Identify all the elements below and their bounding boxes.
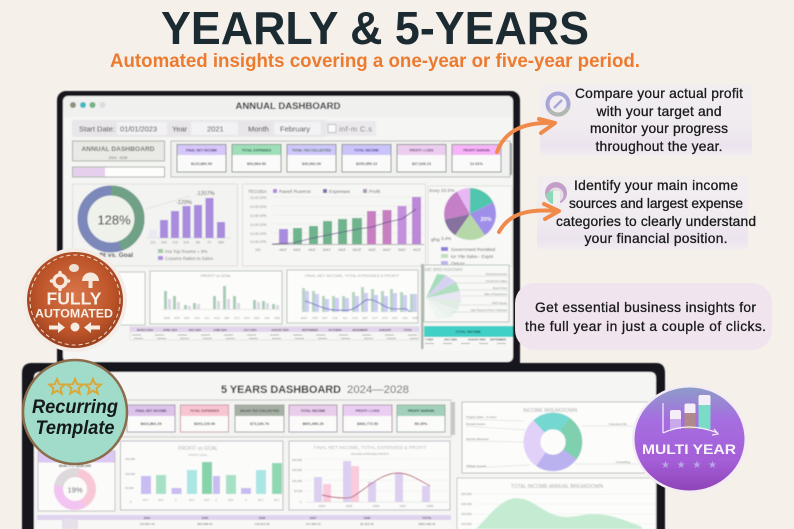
KPI cards row: TOTAL EXPENSES (242, 148, 272, 152)
panel: final net income chart: 2027 (400, 504, 407, 508)
panel: final net income chart: APR (312, 316, 318, 320)
panel: income breakdown fan chart: NWS Equity (492, 301, 508, 305)
window control dots (70, 102, 106, 108)
bar chart: purple bars: 5A (196, 240, 201, 244)
KPI cards row: PROFIT / LOSS (410, 148, 434, 152)
panel: income breakdown fan chart: Late Payment Fees Collected (470, 308, 507, 312)
panel: profit vs goal chart: 150,000 (125, 457, 136, 461)
panel: profit vs goal chart (120, 441, 283, 510)
panel: monthly bars and line chart: Profit (369, 189, 381, 195)
five years heading: 2024—2028 (347, 384, 409, 396)
panel: final net income chart: FINAL NET INCOME, TOTAL EXPENSES & PROFIT (305, 273, 400, 278)
filter bar: Start Date: (79, 124, 115, 134)
panel: final net income chart: 2028 (427, 504, 434, 508)
panel: final net income chart: MAR (301, 316, 307, 320)
panel: expense pie chart: 3.4% (441, 236, 451, 241)
callout: identify income sources: your financial position. (584, 231, 728, 246)
panel: final net income chart: INCOME EXPENSES PROFIT (351, 452, 389, 456)
bar chart: purple bars: Hot Top Rooms = 9% (165, 249, 208, 254)
table: yearly figures (37, 514, 451, 529)
callout: compare actual profit: monitor your progress (590, 121, 728, 136)
panel: monthly bars and line chart: 4A3' (293, 248, 301, 252)
panel: monthly bars and line chart: 10.00 EPK (250, 214, 267, 218)
panel: profit vs goal chart: J' (215, 498, 217, 502)
badge: fully automated: FULLY (46, 288, 102, 308)
panel: income breakdown fan chart (421, 264, 509, 349)
KPI cards row: 22.61% (470, 162, 484, 166)
panel: profit vs goal chart: J'' (175, 498, 178, 502)
panel: profit vs goal chart: PROFIT vs GOAL (201, 274, 231, 278)
bar chart: purple bars: 116 (183, 240, 189, 244)
KPI cards row: SALES TAX COLLECTED (240, 409, 280, 413)
table: total income teal: AUGUST 2024 (468, 338, 486, 342)
table: annual monthly figures: SEPTEMBER (302, 328, 318, 332)
table: annual monthly figures: MAY 2024 (189, 328, 202, 332)
panel: profit vs goal chart: J'' (245, 498, 248, 502)
table: total income teal (424, 326, 513, 350)
panel: monthly bars and line chart: 4A3' (368, 248, 376, 252)
panel: profit vs goal chart: M'H' (158, 498, 164, 502)
icon: gear (50, 271, 70, 291)
filter bar: Year (172, 124, 188, 134)
callout: compare actual profit: Compare your actual profit (575, 86, 743, 101)
panel: monthly bars and line chart: 4G3' (413, 248, 421, 252)
panel: final net income chart: JUN (332, 316, 338, 320)
left title box (72, 141, 164, 177)
panel: monthly bars and line chart: M4J' (323, 248, 331, 252)
panel: monthly bars and line chart: 10.00 EPK (250, 232, 267, 236)
panel: monthly bars and line chart: 10.00 EPK (250, 223, 267, 227)
panel: income breakdown donut: Affiliate Income (466, 464, 487, 468)
bar chart: purple bars: 111 (150, 240, 156, 244)
panel: profit vs goal chart: M'J'' (274, 498, 280, 502)
panel: income breakdown donut (462, 402, 656, 473)
bar chart: purple bars: Cosums Ratles In Sales (165, 256, 214, 261)
filter bar: 2021 (207, 124, 224, 134)
panel: total income annual breakdown area chart: 200,000 (461, 502, 472, 506)
bar chart: purple bars: -120% (176, 200, 192, 206)
panel: total income annual breakdown area chart: 100,000 (461, 522, 472, 526)
panel: income breakdown donut: INCOME BREAKDOWN (523, 408, 578, 414)
KPI cards row: $691,096.29 (302, 422, 324, 426)
panel: total income annual breakdown area chart: TOTAL INCOME ANNUAL BREAKDOWN (511, 484, 604, 490)
panel: final net income chart: MAY (322, 316, 328, 320)
icon: chat bubble (69, 264, 79, 272)
panel: final net income chart: 100,000 (292, 479, 303, 483)
KPI cards row: TOTAL EXPENSES (190, 409, 220, 413)
KPI cards row: $120,893.00 (191, 162, 212, 166)
filter bar: February (280, 124, 310, 134)
filter bar (72, 120, 376, 137)
KPI cards row: $30,062.00 (302, 162, 321, 166)
panel: income breakdown fan chart: ME BREAKDOWN (425, 267, 463, 272)
panel: income breakdown donut: Project Sales - In-store (466, 415, 497, 419)
table: total income teal: SEPTEMBER (490, 338, 506, 342)
table: annual monthly figures: MARCH 2024 (137, 328, 154, 332)
table: total income teal: Y 2024 (425, 338, 434, 342)
panel: final net income chart: 2024 (319, 504, 326, 508)
pie chart: 20% (480, 217, 492, 223)
panel: monthly bars and line chart: 1KI (255, 248, 261, 252)
callout: essential business insights (515, 283, 772, 350)
panel: monthly bars and line chart: 4A3' (338, 248, 346, 252)
panel: profit vs goal chart: M'H' (228, 498, 234, 502)
panel: profit vs goal chart: M'P' (204, 498, 210, 502)
KPI cards row: PROFIT MARGIN (463, 148, 490, 152)
donut: 128% (82, 190, 140, 248)
table: yearly figures: 2024 (144, 516, 151, 520)
panel: profit vs goal chart: M'Y'' (143, 498, 150, 502)
table: annual monthly figures (130, 326, 419, 340)
table: annual monthly figures: NOVEMBER (352, 328, 368, 332)
panel: profit vs goal chart: JUL (205, 316, 210, 320)
panel: income breakdown fan chart: Reimbursements (486, 272, 508, 276)
panel: profit vs goal chart: JAN (264, 316, 270, 320)
badge: recurring template: Template (36, 418, 115, 439)
panel: profit vs goal donut and bars: Profit vs. Goal (89, 252, 133, 259)
panel: final net income chart: FINAL NET INCOME, TOTAL EXPENSES & PROFIT (314, 445, 426, 451)
panel: goal donut 19%: 19% (67, 486, 83, 494)
panel: final net income chart: 2026 (373, 504, 380, 508)
table: annual monthly figures: JUNE 2024 (213, 328, 227, 332)
table: annual monthly figures: OCTOBER (329, 328, 342, 332)
panel: final net income chart (289, 441, 450, 510)
panel: profit vs goal chart: MAY (184, 316, 190, 320)
panel: profit vs goal chart: APR (174, 316, 180, 320)
KPI cards row: PROFIT MARGIN (408, 409, 435, 413)
table: yearly figures: 145,912.06 (254, 522, 270, 526)
panel: monthly bars and line chart: 10.00 EPK (250, 205, 267, 209)
table: yearly figures: 2027 (310, 516, 317, 520)
callout: identify income sources (537, 176, 756, 250)
table: total income teal: TOTAL INCOME (455, 330, 481, 334)
table: yearly figures: 147,406.45 (305, 522, 321, 526)
KPI cards row (171, 141, 512, 177)
callout: compare actual profit (540, 84, 752, 156)
panel: monthly bars and line chart: Ravell Ruerros (279, 189, 311, 195)
KPI cards row (122, 400, 455, 437)
table: yearly figures: $1,302.45 (360, 522, 374, 526)
title: YEARLY & 5-YEARS (161, 2, 589, 54)
panel: final net income chart: 50,000 (294, 489, 303, 493)
table: yearly figures: 2026 (259, 516, 266, 520)
callout: compare actual profit: throughout the year. (596, 139, 722, 154)
KPI cards row: $73,106.76 (250, 422, 269, 426)
panel: profit vs goal chart: OCT (234, 316, 240, 320)
badge: multi year: ★★★★ (661, 460, 717, 471)
table: annual monthly figures: JULY 2024 (244, 328, 257, 332)
table: yearly figures: 2028 (364, 516, 371, 520)
callout: identify income sources: categories to clearly understand (556, 214, 756, 229)
bar chart: purple bars: 116 (172, 240, 178, 244)
panel: total income annual breakdown area chart (457, 478, 656, 529)
panel: expense pie chart (428, 186, 512, 266)
panel: final net income chart: SEP (362, 316, 368, 320)
callout: compare actual profit: with your target and (596, 104, 722, 119)
pie legend: Government Remitted (451, 247, 496, 252)
callout: identify income sources: Identify your main income (574, 178, 738, 193)
table: annual monthly figures: AUGUST 2024 (271, 328, 289, 332)
KPI cards row: $93,564.90 (247, 162, 266, 166)
arrow: to income callout (499, 204, 559, 232)
pie legend: tor Ytle Sales - Expnt (451, 254, 494, 259)
laptop: annual dashboard (57, 91, 520, 381)
panel: monthly bars and line chart: MU3' (353, 248, 362, 252)
panel: profit vs goal chart: MAR (164, 316, 170, 320)
panel: profit vs goal chart (150, 271, 282, 324)
KPI cards row: TOTAL INCOME (301, 409, 326, 413)
panel: final net income chart: JAN (402, 316, 408, 320)
subtitle: Automated insights covering a one-year or five-year period. (110, 50, 640, 72)
panel: monthly bars and line chart (242, 184, 426, 266)
panel: monthly bars and line chart: 4A3' (308, 248, 316, 252)
panel: final net income chart: 2025 (346, 504, 353, 508)
callout: identify income sources: sources and largest expense (569, 196, 743, 211)
panel: expense pie chart: gfvg (431, 237, 440, 242)
badge: fully automated (23, 248, 127, 352)
panel: profit vs goal chart: SEP (224, 316, 230, 320)
KPI cards row: $27,028.13 (412, 162, 431, 166)
KPI cards row: TOTAL INCOME (354, 148, 380, 152)
donut chart (523, 412, 583, 472)
pie legend: Oeture (451, 261, 465, 266)
table: annual monthly figures: JANUARY (379, 328, 391, 332)
KPI cards row: PROFIT / LOSS (356, 409, 380, 413)
icon: rising bars (663, 395, 718, 435)
callout: essential business insights: the full year in just a couple of clicks. (525, 319, 766, 334)
panel: final net income chart (287, 270, 418, 323)
panel: profit vs goal donut and bars (72, 184, 238, 266)
icon: three stars (49, 379, 101, 394)
laptop: five years dashboard (22, 363, 665, 529)
panel: profit vs goal chart: M'J'' (258, 498, 264, 502)
panel: monthly bars and line chart: 5A3' (398, 248, 406, 252)
panel: monthly bars and line chart: 10.00 EPK (250, 196, 267, 200)
panel: expense pie chart: Suvy 23.5% (429, 188, 455, 194)
icon: arrows and clock (49, 322, 100, 333)
panel: profit vs goal chart: PROFIT GOAL (189, 453, 208, 457)
panel: income breakdown fan chart: Sale of Equipment (484, 292, 507, 296)
panel: goal donut 19% (38, 451, 115, 512)
pie legend (441, 247, 496, 266)
donut: 128%: 128% (97, 212, 131, 228)
table: annual monthly figures: TOTAL (404, 328, 413, 332)
KPI cards row: $423,863.29 (140, 422, 162, 426)
left title box: 2024 - 2025 (109, 156, 127, 160)
panel: profit vs goal chart: 50,000 (125, 486, 134, 490)
panel: monthly bars and line chart: M4J' (383, 248, 391, 252)
panel: profit vs goal chart: NOV (244, 316, 250, 320)
panel: income breakdown donut: Consulting (616, 460, 631, 464)
panel: profit vs goal chart: PROFIT vs GOAL (178, 446, 218, 452)
bar chart: purple bars: 240 (161, 240, 167, 244)
KPI cards row: 58.20% (415, 422, 428, 426)
left title box: ANNUAL DASHBOARD (82, 146, 155, 153)
table: total income teal: JULY 2024 (444, 338, 457, 342)
panel: income breakdown donut: Rental Income (466, 422, 486, 426)
panel: income breakdown fan chart: Investment Sales (486, 279, 508, 283)
panel: total income annual breakdown area chart: 250,000 (461, 492, 472, 496)
panel: monthly bars and line chart: TECODA (248, 189, 267, 194)
panel: profit vs goal chart: FEB (274, 316, 280, 320)
panel: final net income chart: NOV (382, 316, 388, 320)
icon: pie and bars (545, 182, 567, 204)
panel: remaining budget (110, 272, 145, 325)
panel: profit vs goal chart: AUG (214, 316, 220, 320)
panel: goal donut 19%: $346,771 / $180,000 (59, 464, 91, 468)
badge: multi year (632, 385, 747, 493)
icon: progress ring (548, 94, 568, 114)
KPI cards row: $203,129.06 (194, 422, 215, 426)
KPI cards row: $155,355.13 (356, 162, 377, 166)
KPI cards row: TOTAL TAX COLLECTED (292, 148, 332, 152)
panel: income breakdown donut: Insurance Re (609, 422, 627, 426)
badge: recurring template (23, 360, 127, 464)
table: yearly figures: TOTAL (422, 516, 432, 520)
panel: final net income chart: FEB (412, 316, 418, 320)
badge: recurring template: Recurring (32, 397, 118, 418)
panel: final net income chart: AUG (352, 316, 358, 320)
panel: final net income chart: 150,000 (292, 468, 303, 472)
panel: final net income chart: 200,000 (292, 458, 303, 462)
panel: monthly bars and line chart: Expenses (329, 189, 351, 195)
five years heading: 5 YEARS DASHBOARD (221, 384, 341, 396)
panel: final net income chart: DEC (392, 316, 398, 320)
panel: profit vs goal chart: M'J'' (189, 498, 195, 502)
panel: monthly bars and line chart: 4A3' (279, 248, 287, 252)
badge: multi year: MULTI YEAR (642, 441, 736, 457)
panel: monthly bars and line chart: 10.00 EPK (250, 240, 267, 244)
bar chart: purple bars: .1207% (196, 191, 215, 197)
KPI cards row: $366,773.53 (357, 422, 378, 426)
icon: chart dome (82, 272, 99, 288)
table: yearly figures: $691,096.29 (419, 522, 436, 526)
filter bar: Month (248, 124, 269, 134)
panel: profit vs goal chart: 0 (130, 500, 132, 504)
filter bar: inf-m C.s (339, 124, 372, 134)
panel: final net income chart: OCT (372, 316, 378, 320)
table: annual monthly figures: APRIL 2024 (163, 328, 178, 332)
callout: essential business insights: Get essential business insights for (535, 300, 756, 315)
table: yearly figures: 2025 (202, 516, 209, 520)
arrow: to profit callout (497, 119, 555, 152)
five years heading (221, 384, 409, 396)
panel: final net income chart: 0 (300, 500, 302, 504)
bar chart: purple bars (146, 191, 231, 261)
panel: total income annual breakdown area chart: 150,000 (461, 512, 472, 516)
panel: profit vs goal chart: 100,000 (125, 472, 136, 476)
badge: fully automated: AUTOMATED (35, 308, 113, 320)
panel: profit vs goal chart: JUN (194, 316, 200, 320)
panel: final net income chart: JUL (343, 316, 348, 320)
panel: profit vs goal chart: DEC (254, 316, 260, 320)
panel: income breakdown donut: Service Revenue (466, 437, 489, 441)
bar chart: purple bars: 70 (207, 240, 211, 244)
table: yearly figures: 125,897.45 (139, 522, 155, 526)
filter bar: 01/01/2023 (120, 124, 157, 134)
bar chart: purple bars: 2B0 (218, 240, 224, 244)
annual dashboard heading: ANNUAL DASHBOARD (236, 101, 341, 112)
KPI cards row: FINAL NET INCOME (135, 409, 167, 413)
panel: income breakdown fan chart: Event Fees (493, 286, 508, 290)
table: yearly figures: $84,998.45 (197, 522, 213, 526)
KPI cards row: FINAL NET INCOME (186, 148, 218, 152)
